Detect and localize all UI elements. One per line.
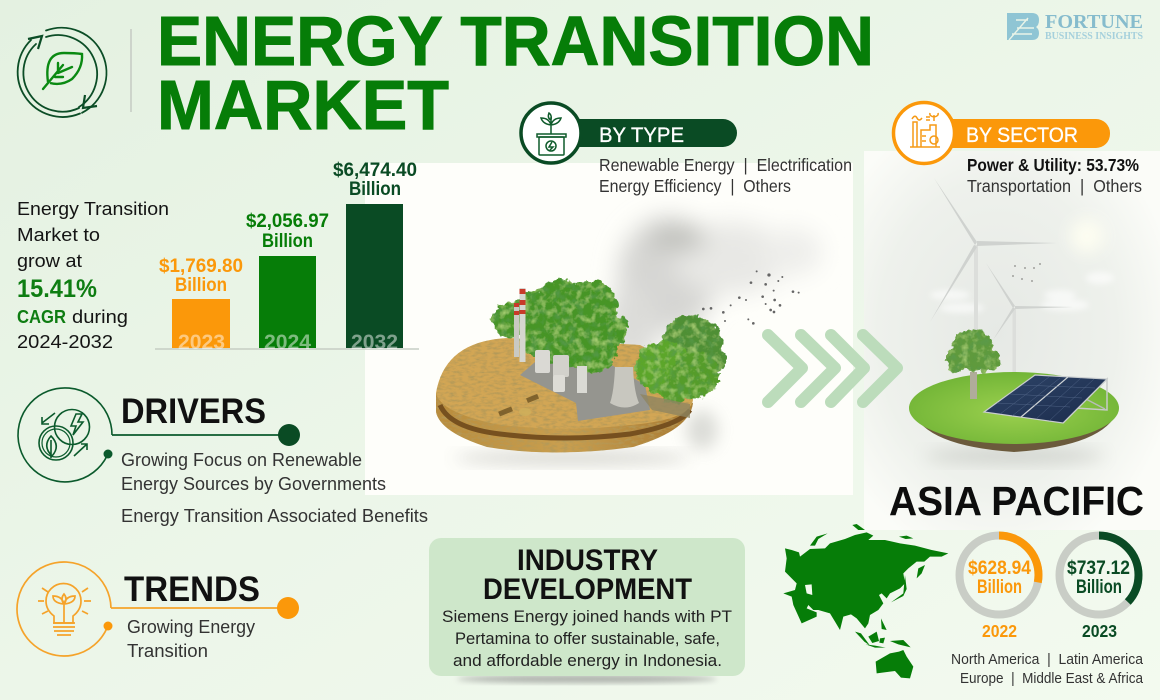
bar chart: $1,769.80: [159, 256, 243, 277]
arrows: chevrons: [768, 335, 897, 402]
text block: other regions: [951, 651, 1144, 687]
title: MARKET: [157, 66, 449, 144]
text block: CAGR summary: CAGR: [17, 306, 66, 327]
bar chart: Billion: [349, 179, 401, 200]
cooling tower: [610, 367, 639, 408]
sand details: [498, 394, 539, 416]
icon: green factory: [910, 113, 940, 147]
divider: [130, 29, 132, 112]
bar chart: $2,056.97: [246, 211, 329, 232]
text block: type segments: Renewable Energy | Electrification: [599, 155, 852, 175]
illustration: wind turbines and solar panel: [909, 178, 1119, 463]
by type badge: [521, 103, 737, 163]
text block: drivers list: Energy Transition Associated Benefits: [121, 506, 428, 526]
turbine: large: [930, 178, 1057, 345]
icon: drivers renewable energy: [18, 388, 112, 482]
heading: trends: TRENDS: [124, 570, 260, 609]
donut: 2022: [960, 536, 1038, 641]
donut: 2023: 2023: [1082, 621, 1117, 641]
grass disc: [912, 410, 1118, 452]
bar chart: 2024: [264, 331, 311, 354]
donut: 2022: $628.94: [968, 558, 1031, 579]
trees: left cluster: [492, 279, 628, 373]
text block: other regions: North America | Latin America: [951, 651, 1144, 668]
birds: [702, 270, 800, 325]
text block: CAGR summary: [17, 198, 169, 352]
connector: trends: [111, 597, 299, 619]
by type badge: BY TYPE: [599, 124, 684, 147]
birds small: [1012, 263, 1041, 282]
icon: recycling leaf logo: [18, 28, 106, 117]
icon: trends light bulb: [17, 562, 113, 656]
chimneys: [514, 288, 526, 362]
icon: battery plant: [537, 113, 566, 155]
text block: sector segments: [967, 155, 1142, 196]
donut: 2022: Billion: [977, 577, 1022, 598]
bar chart: 2032: [351, 331, 398, 354]
panel: industry development: [429, 538, 745, 683]
fence trunks: [640, 394, 690, 418]
logo: Fortune Business Insights: FORTUNE: [1045, 11, 1143, 33]
text block: sector segments: Power & Utility: 53.73%: [967, 155, 1139, 175]
text block: drivers list: Growing Focus on Renewable: [121, 450, 362, 470]
text block: trends list: [127, 617, 255, 661]
soil side: [436, 393, 693, 452]
text block: trends list: Transition: [127, 641, 208, 661]
bar chart: Billion: [262, 231, 313, 252]
title: [157, 2, 874, 144]
soil top: [436, 338, 693, 429]
panel: drivers: [18, 388, 428, 526]
text block: development summary: and affordable energy in Indonesia.: [453, 651, 722, 670]
bar chart: Billion: [175, 275, 227, 296]
bar chart: 2023: [178, 331, 225, 354]
panel: trends: [17, 562, 299, 661]
illustration: power plant on soil disc: [436, 217, 822, 464]
bar chart: [155, 160, 419, 354]
panel: right illustration backdrop: [864, 151, 1160, 530]
text block: trends list: Growing Energy: [127, 617, 255, 637]
donut: 2023: Billion: [1076, 577, 1122, 598]
text block: development summary: Siemens Energy joined hands with PT: [442, 607, 732, 626]
donut: 2023: $737.12: [1067, 558, 1130, 579]
text block: type segments: Energy Efficiency | Others: [599, 176, 791, 196]
text block: development summary: [442, 607, 732, 670]
text block: development summary: Pertamina to offer sustainable, safe,: [455, 629, 720, 648]
text block: CAGR summary: 15.41%: [17, 275, 97, 303]
text block: drivers list: [121, 450, 428, 526]
logo: Fortune Business Insights: BUSINESS INSIGHTS: [1045, 31, 1143, 42]
clouds: [930, 272, 1114, 313]
smoke: [606, 217, 822, 367]
text block: CAGR summary: during: [72, 306, 128, 327]
text block: CAGR summary: Market to: [17, 224, 100, 245]
trees: right cluster: [636, 315, 726, 404]
text block: type segments: [599, 155, 852, 196]
industrial ground: [520, 358, 650, 421]
by sector badge: BY SECTOR: [966, 124, 1078, 147]
donut: 2022: 2022: [982, 621, 1017, 641]
donut: 2023: [1060, 536, 1138, 641]
turbine: small: [986, 263, 1073, 390]
text block: drivers list: Energy Sources by Governments: [121, 474, 386, 494]
text block: CAGR summary: Energy Transition: [17, 198, 169, 219]
connector: drivers: [112, 424, 300, 446]
text block: CAGR summary: 2024-2032: [17, 331, 113, 352]
solar panel: [984, 375, 1107, 423]
region heading: Asia Pacific: ASIA PACIFIC: [889, 478, 1144, 524]
bar chart: $6,474.40: [333, 160, 417, 181]
by sector badge: [894, 102, 1110, 164]
map: Asia Pacific: [783, 524, 948, 678]
heading: industry development: DEVELOPMENT: [483, 573, 692, 606]
title: ENERGY TRANSITION: [157, 2, 874, 80]
logo: Fortune Business Insights: [1007, 11, 1143, 42]
heading: industry development: [483, 544, 692, 606]
text block: other regions: Europe | Middle East & Africa: [960, 670, 1144, 687]
heading: drivers: DRIVERS: [121, 392, 266, 431]
text block: sector segments: Transportation | Others: [967, 176, 1142, 196]
text block: CAGR summary: grow at: [17, 250, 82, 271]
factory buildings: [535, 350, 587, 393]
heading: industry development: INDUSTRY: [517, 544, 658, 577]
panel: central illustration backdrop: [365, 163, 853, 495]
tree: [946, 329, 1000, 399]
